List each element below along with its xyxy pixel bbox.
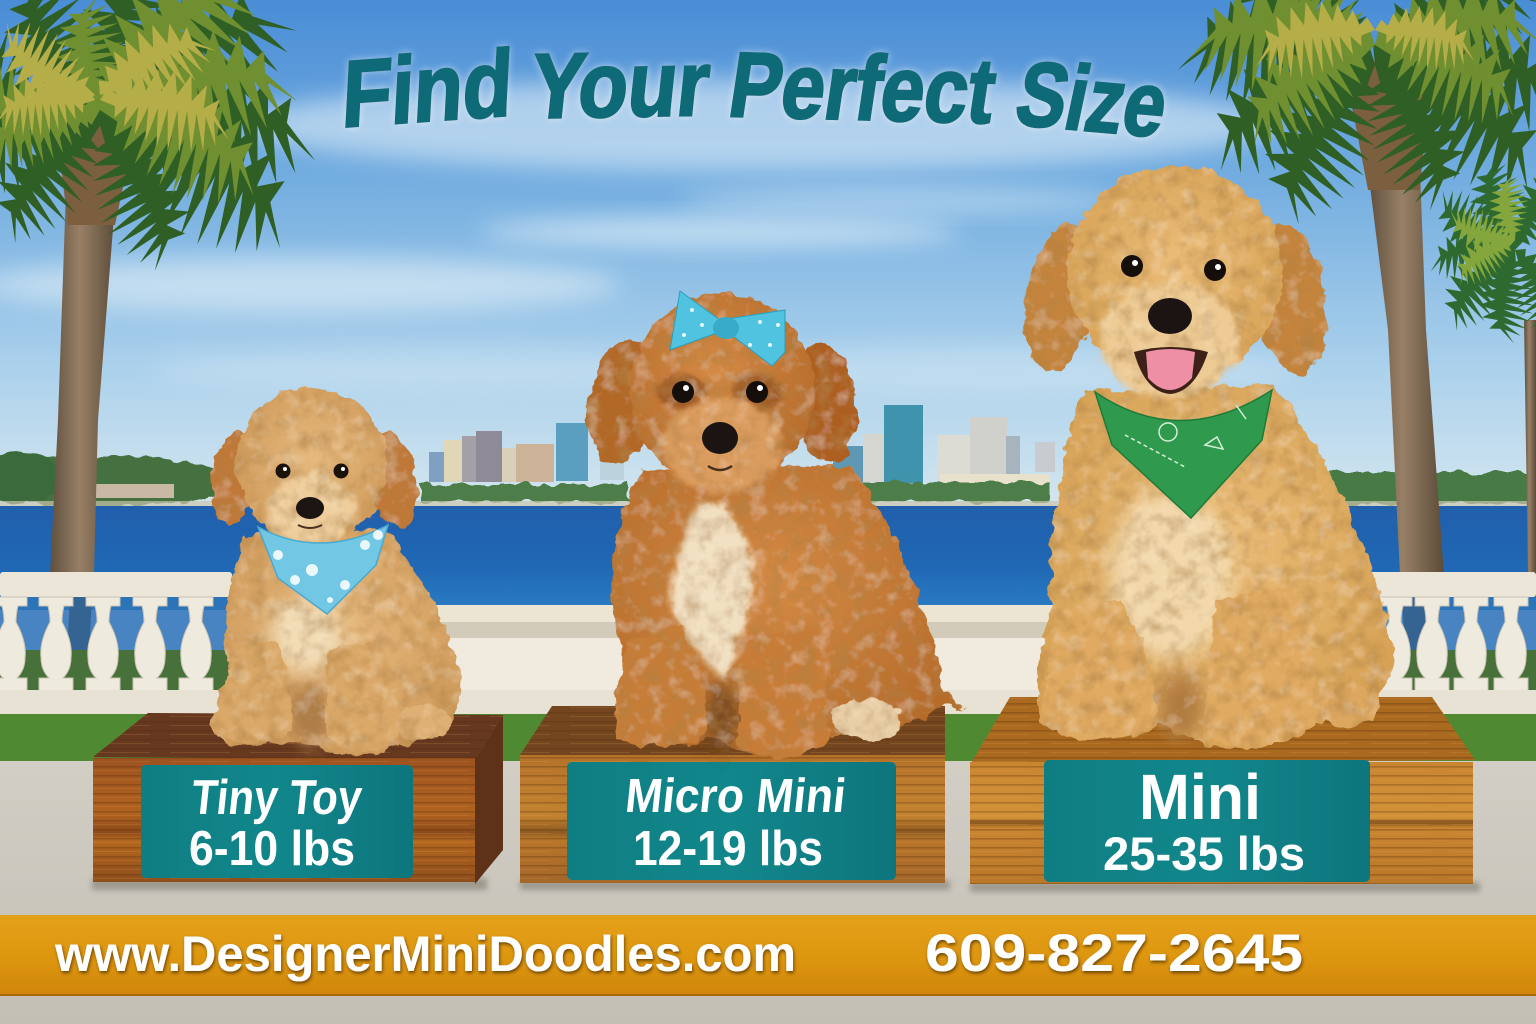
palm tree: left <box>0 0 323 672</box>
sign <box>1044 760 1370 882</box>
fronds <box>1421 153 1536 346</box>
title: Your <box>526 31 715 138</box>
fronds <box>0 0 323 282</box>
balusters <box>0 597 1528 691</box>
skyline <box>429 405 1055 494</box>
trunk <box>1524 320 1536 575</box>
fur body <box>205 387 460 754</box>
crate shadows <box>92 878 1480 892</box>
sign <box>567 762 896 880</box>
trunk <box>1368 170 1444 575</box>
title: Size <box>1008 42 1177 157</box>
dog: mini <box>1017 166 1392 749</box>
dog: micro mini <box>581 291 965 757</box>
sign <box>141 765 413 878</box>
background: sky <box>0 0 1536 520</box>
face <box>1121 255 1226 394</box>
sign: Tiny Toy <box>189 771 365 825</box>
fur body <box>1017 166 1392 749</box>
balustrade and seawall <box>0 572 1536 716</box>
title <box>340 30 1177 157</box>
title: Find <box>340 30 515 147</box>
bandana <box>258 525 388 614</box>
sign: Mini <box>1139 761 1261 833</box>
trunk <box>50 190 116 575</box>
bandana <box>1095 390 1272 518</box>
dog: tiny toy <box>205 387 460 754</box>
crate: mini <box>970 697 1475 884</box>
fur body <box>581 293 965 757</box>
face <box>276 464 348 528</box>
title: Perfect <box>723 33 1002 143</box>
palm tree: far right <box>1421 153 1536 575</box>
grass <box>0 714 1536 762</box>
sign: 6-10 lbs <box>189 822 355 876</box>
fronds <box>1174 0 1536 239</box>
palm tree: right <box>1174 0 1536 672</box>
water <box>0 506 1536 610</box>
phone: 609-827-2645 <box>925 924 1303 983</box>
sign: 25-35 lbs <box>1103 827 1305 880</box>
banner: contact bar <box>0 915 1536 996</box>
sign: Micro Mini <box>623 769 849 823</box>
crate: micro mini <box>520 706 945 883</box>
bow <box>670 291 785 366</box>
website: www.DesignerMiniDoodles.com <box>54 926 796 982</box>
pavement <box>0 761 1536 1024</box>
sign: 12-19 lbs <box>633 822 823 876</box>
tree line on far shore <box>0 452 1536 508</box>
crate: tiny toy <box>93 713 503 884</box>
face <box>672 381 768 470</box>
